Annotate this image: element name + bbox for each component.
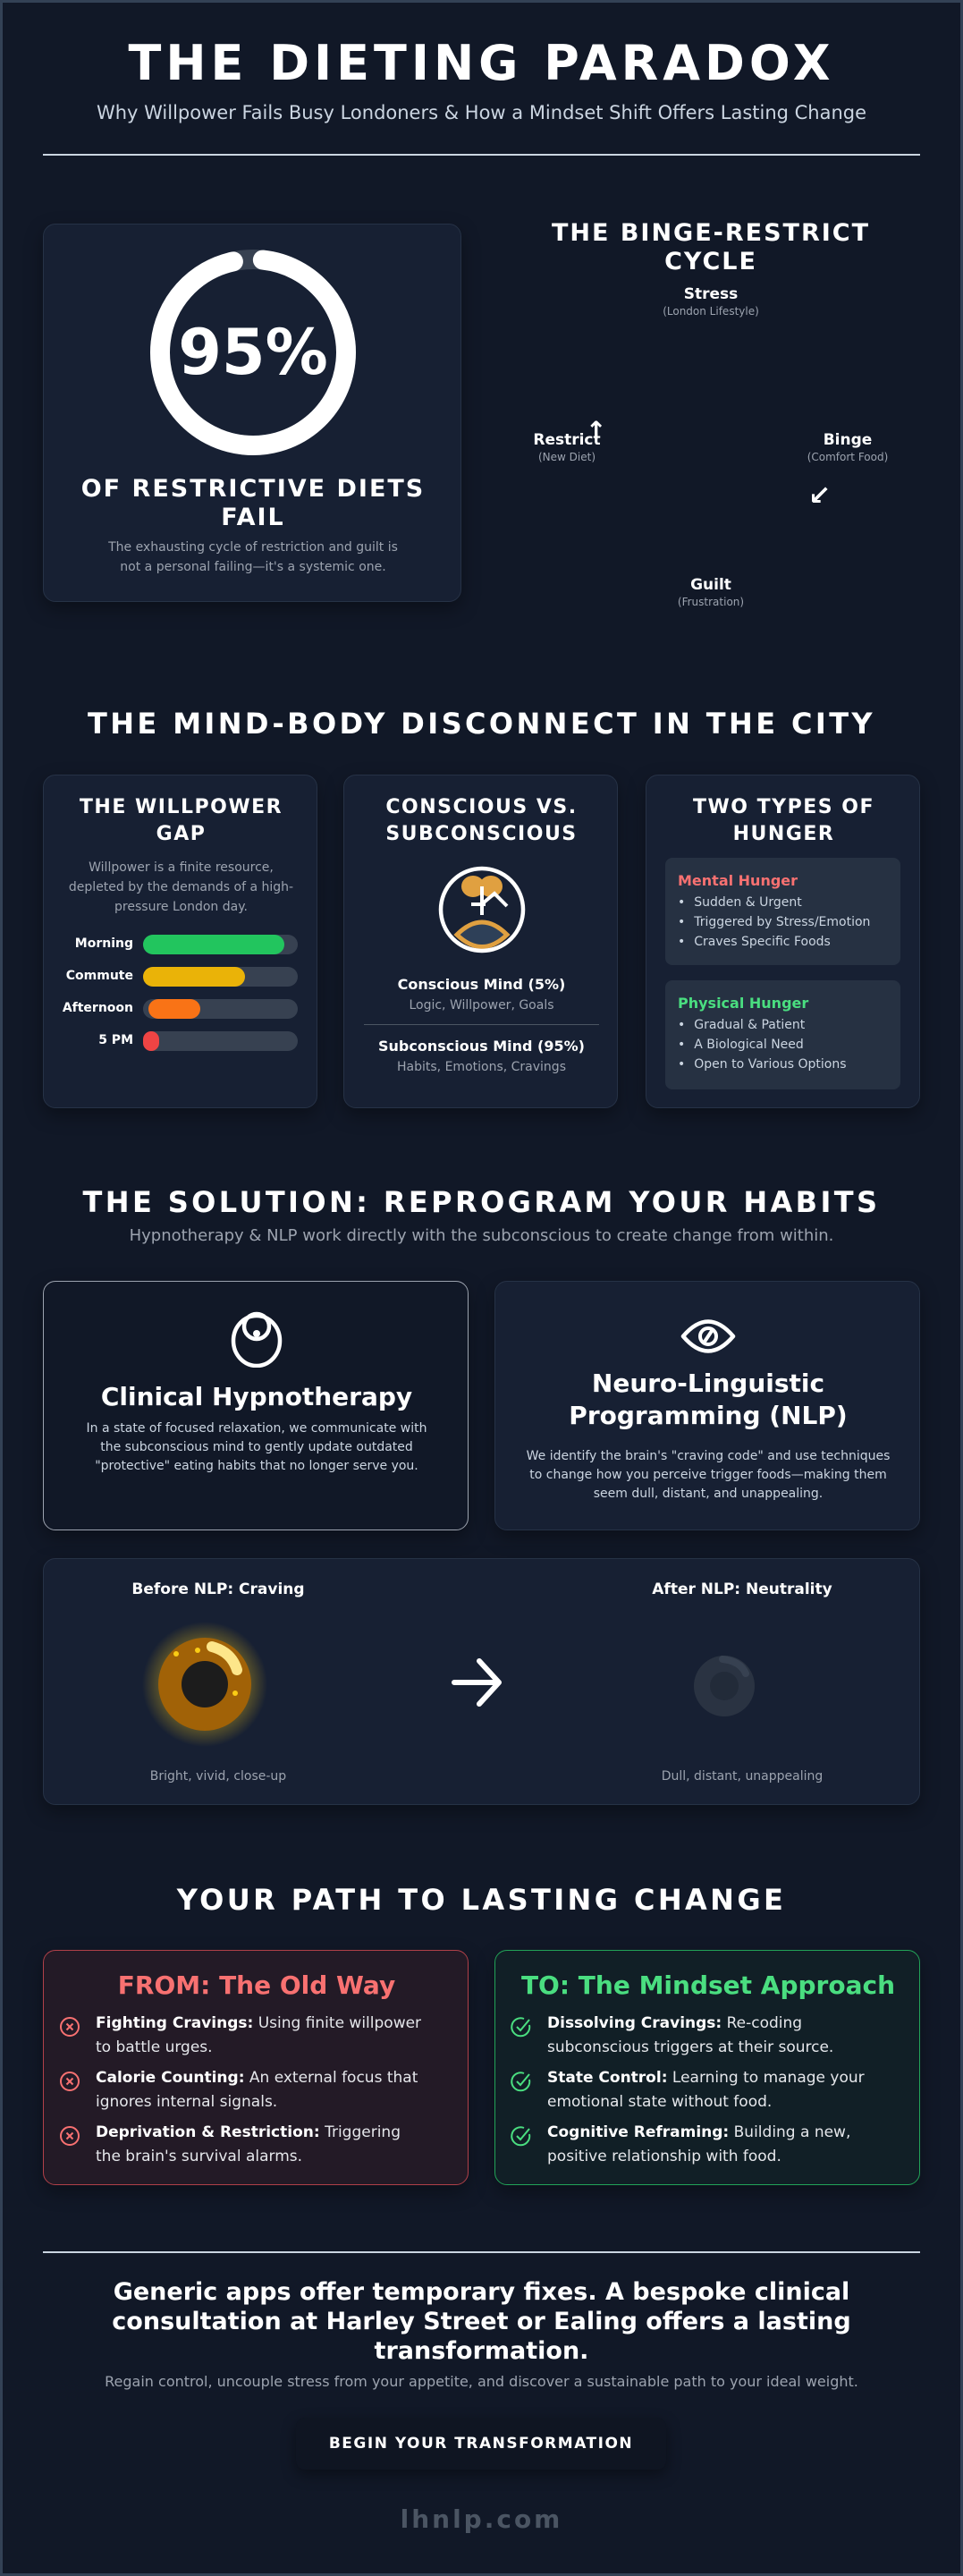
node: restrict: Restrict xyxy=(533,431,601,449)
title: Neuro-Linguistic xyxy=(592,1368,824,1398)
bar chart: 5 PM xyxy=(98,1033,133,1047)
list item: Deprivation & Restriction: Triggering the brain's survival alarms. xyxy=(96,2123,401,2165)
panel: mindset approach xyxy=(494,1950,920,2185)
bar chart: Morning xyxy=(75,936,133,951)
title: Clinical Hypnotherapy xyxy=(101,1382,412,1411)
after caption: Dull, distant, unappealing xyxy=(662,1769,823,1784)
card title xyxy=(79,796,283,845)
card title: HUNGER xyxy=(733,823,834,845)
cycle heading: CYCLE xyxy=(664,248,757,275)
bar chart: Commute xyxy=(66,969,133,983)
panel: two types of hunger xyxy=(646,775,920,1108)
stat description: The exhausting cycle of restriction and guilt is not a personal failing—it's a systemic one. xyxy=(108,540,398,574)
physical hunger box: Physical Hunger xyxy=(678,995,808,1012)
panel: willpower gap xyxy=(43,775,317,1108)
list item: Dissolving Cravings: Re-coding subconscious triggers at their source. xyxy=(547,2014,833,2056)
donut chart: 95% xyxy=(178,316,328,389)
node: restrict: (New Diet) xyxy=(538,451,596,463)
list item: Fighting Cravings: Using finite willpower to battle urges. xyxy=(96,2014,421,2056)
list item: State Control: Learning to manage your emotional state without food. xyxy=(547,2069,865,2111)
section heading: path: YOUR PATH TO LASTING CHANGE xyxy=(177,1883,786,1917)
card title xyxy=(693,796,874,845)
description: Willpower is a finite resource, depleted by the demands of a high-pressure London day. xyxy=(69,860,293,914)
title: FROM: The Old Way xyxy=(118,1970,395,2000)
section heading: mind-body: THE MIND-BODY DISCONNECT IN THE CITY xyxy=(88,707,875,741)
panel: before/after NLP xyxy=(43,1558,920,1805)
icon: dull donut xyxy=(694,1656,755,1716)
bar chart xyxy=(63,935,298,1051)
card title: GAP xyxy=(156,823,206,845)
icon: eye xyxy=(681,1319,735,1353)
closing subtext: Regain control, uncouple stress from your appetite, and discover a sustainable path to your ideal weight. xyxy=(105,2373,858,2390)
node: binge: Binge xyxy=(824,431,872,449)
conscious label: Conscious Mind (5%) xyxy=(398,976,565,993)
mental hunger box: Triggered by Stress/Emotion xyxy=(694,915,870,929)
arrow down-left: ↙ xyxy=(808,480,831,512)
node: binge: (Comfort Food) xyxy=(807,451,888,463)
panel: 95% stat xyxy=(43,224,461,602)
card title xyxy=(385,796,578,845)
card title: THE WILLPOWER xyxy=(80,796,283,818)
description: In a state of focused relaxation, we communicate with the subconscious mind to gently update outdated "protective" eating habits that no longer serve you. xyxy=(86,1421,427,1473)
description: We identify the brain's "craving code" and use techniques to change how you perceive trigger foods—making them seem dull, distant, and unappealing. xyxy=(527,1449,890,1501)
mental hunger box: Craves Specific Foods xyxy=(694,935,831,949)
icon: hypnosis xyxy=(231,1311,283,1368)
panel: old way xyxy=(43,1950,469,2185)
subconscious label: Subconscious Mind (95%) xyxy=(378,1038,585,1055)
mental hunger box: Sudden & Urgent xyxy=(694,895,802,910)
before caption: Bright, vivid, close-up xyxy=(150,1769,286,1784)
node: stress: Stress xyxy=(684,285,738,303)
card title: TWO TYPES OF xyxy=(693,796,874,818)
panel: NLP xyxy=(494,1281,920,1530)
physical hunger box: Gradual & Patient xyxy=(694,1018,805,1032)
icon: bright donut xyxy=(145,1624,265,1744)
CTA button: BEGIN YOUR TRANSFORMATION xyxy=(329,2435,633,2453)
mental hunger box xyxy=(665,858,900,965)
card title: SUBCONSCIOUS xyxy=(385,823,578,845)
cycle heading xyxy=(552,219,870,275)
title xyxy=(569,1368,848,1430)
subconscious label xyxy=(378,1038,585,1074)
arrow xyxy=(452,1658,502,1707)
subconscious label: Habits, Emotions, Cravings xyxy=(397,1060,566,1074)
node: guilt: (Frustration) xyxy=(678,596,744,608)
mental hunger box: Mental Hunger xyxy=(678,872,798,889)
physical hunger box xyxy=(665,980,900,1089)
footer brand: lhnlp.com xyxy=(401,2504,562,2534)
section subtitle: Hypnotherapy & NLP work directly with the subconscious to create change from within. xyxy=(130,1226,833,1245)
CTA button xyxy=(296,2418,666,2470)
donut chart xyxy=(150,250,356,455)
closing statement: Generic apps offer temporary fixes. A bespoke clinical consultation at Harley Street or Ealing offers a lasting transformation. xyxy=(112,2278,851,2365)
arrow up: ↑ xyxy=(586,416,606,445)
node: guilt xyxy=(678,576,744,608)
node: stress xyxy=(663,285,759,318)
stat label: OF RESTRICTIVE DIETS FAIL xyxy=(81,475,425,531)
after label: After NLP: Neutrality xyxy=(652,1580,832,1598)
list item: Calorie Counting: An external focus that ignores internal signals. xyxy=(96,2069,418,2111)
card title: CONSCIOUS VS. xyxy=(385,796,578,818)
before label: Before NLP: Craving xyxy=(131,1580,305,1598)
subtitle: Why Willpower Fails Busy Londoners & How a Mindset Shift Offers Lasting Change xyxy=(97,102,866,123)
bar chart: Afternoon xyxy=(63,1001,133,1015)
node: binge xyxy=(807,431,888,463)
cycle heading: THE BINGE-RESTRICT xyxy=(552,219,870,247)
node: restrict xyxy=(533,431,601,463)
panel: conscious vs subconscious xyxy=(343,775,618,1108)
title: Programming (NLP) xyxy=(569,1401,848,1430)
conscious label xyxy=(398,976,565,1013)
node: stress: (London Lifestyle) xyxy=(663,305,759,318)
title: THE DIETING PARADOX xyxy=(129,35,835,91)
conscious label: Logic, Willpower, Goals xyxy=(409,998,554,1013)
icon: brain/head xyxy=(438,866,526,953)
list item: Cognitive Reframing: Building a new, positive relationship with food. xyxy=(547,2123,850,2165)
panel: binge-restrict cycle xyxy=(533,219,888,608)
physical hunger box: Open to Various Options xyxy=(694,1057,847,1072)
panel: clinical hypnotherapy xyxy=(43,1281,469,1530)
physical hunger box: A Biological Need xyxy=(694,1038,804,1052)
node: guilt: Guilt xyxy=(690,576,731,594)
title: TO: The Mindset Approach xyxy=(521,1970,895,2000)
section heading: solution: THE SOLUTION: REPROGRAM YOUR HABITS xyxy=(83,1185,880,1219)
